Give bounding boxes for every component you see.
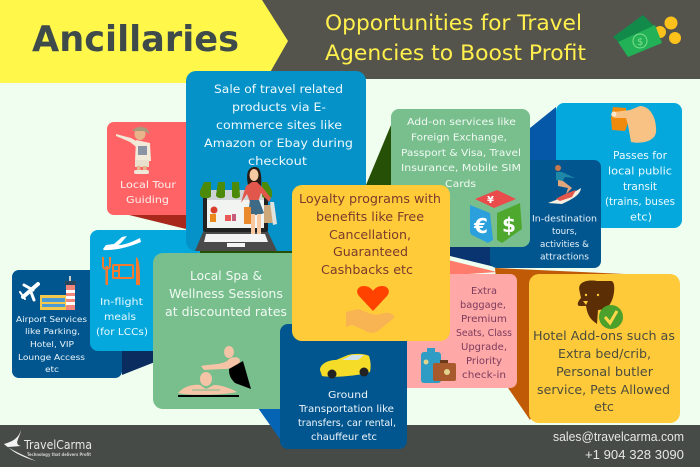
- text: spa: Wellness Sessions: [169, 286, 283, 301]
- icon: currency cube: [470, 190, 522, 243]
- text: extra baggage: check-in: [462, 370, 506, 381]
- text: e-commerce sale: Sale of travel related: [214, 82, 343, 96]
- header dark band: [250, 0, 700, 79]
- text: add-on services: Foreign Exchange,: [411, 132, 507, 144]
- text: in-destination tours: In-destination: [532, 214, 597, 224]
- subtitle: Agencies to Boost Profit: [325, 41, 586, 66]
- text: in-destination tours: attractions: [540, 252, 590, 262]
- panel: ground transportation: [280, 324, 407, 449]
- text: e-commerce sale: Amazon or Ebay during: [204, 136, 353, 150]
- text: ground transportation: Transportation like: [298, 404, 394, 415]
- text: local tour guiding: Guiding: [126, 195, 169, 206]
- text: spa: Local Spa &: [190, 268, 262, 283]
- text: extra baggage: Premium: [461, 314, 507, 325]
- icon: yellow car: [320, 354, 371, 378]
- text: hotel add-ons: Hotel Add-ons such as: [533, 329, 675, 343]
- text: loyalty programs: benefits like Free: [316, 210, 424, 224]
- text: add-on services: Cards: [445, 179, 476, 190]
- text: hotel add-ons: service, Pets Allowed: [537, 383, 670, 397]
- text: passes for transit: [605, 151, 675, 224]
- text: extra baggage: Upgrade,: [461, 342, 507, 353]
- logo: TravelCarma: TravelCarma: [23, 438, 92, 452]
- panel: airport services: [12, 270, 122, 378]
- text: extra baggage: Seats, Class: [456, 328, 512, 339]
- icon: money notes and coins: $: [637, 37, 643, 48]
- text: add-on services: Add-on services like: [407, 117, 516, 128]
- text: passes for transit: etc): [630, 212, 652, 224]
- text: hotel add-ons: etc: [594, 400, 614, 414]
- panel: local tour guiding: [107, 122, 197, 215]
- text: add-on services: Insurance, Mobile SIM: [401, 163, 521, 174]
- text: e-commerce sale: commerce sites like: [216, 118, 342, 132]
- text: in-flight meals: In-flight: [100, 297, 143, 308]
- text: loyalty programs: Cashbacks etc: [321, 263, 413, 277]
- panel: hotel add-ons: [529, 274, 680, 423]
- icon: heart over hand: [346, 286, 394, 333]
- text: airport services: Airport Services: [16, 314, 87, 324]
- text: hotel add-ons: Extra bed/crib,: [558, 347, 651, 361]
- icon: currency cube: $: [502, 213, 516, 237]
- text: loyalty programs: [299, 192, 441, 277]
- icon: online shop laptop with shopper: [195, 167, 277, 251]
- text: loyalty programs: Cancellation,: [329, 228, 411, 242]
- panel: add-on services: [391, 109, 530, 247]
- text: airport services: [16, 314, 87, 374]
- panel: in-flight meals: [90, 230, 200, 351]
- text: in-destination tours: tours,: [552, 227, 577, 237]
- text: in-flight meals: (for LCCs): [96, 327, 148, 338]
- text: passes for transit: Passes for: [613, 151, 668, 162]
- text: passes for transit: local public: [608, 166, 672, 178]
- text: local tour guiding: Local Tour: [120, 180, 177, 191]
- icon: massage: [178, 346, 251, 397]
- text: passes for transit: (trains, buses: [605, 197, 675, 208]
- text: ground transportation: transfers, car rental,: [298, 418, 396, 429]
- text: add-on services: [401, 117, 521, 190]
- text: ground transportation: chauffeur etc: [311, 432, 377, 443]
- text: e-commerce sale: checkout: [248, 154, 307, 168]
- header yellow arrow: [0, 0, 288, 83]
- footer contact: [553, 429, 684, 462]
- text: extra baggage: Priority: [466, 356, 503, 367]
- icon: plane, fork, tray and knife: [103, 236, 141, 285]
- icon: dog with check badge: [578, 280, 623, 329]
- text: e-commerce sale: products via E-: [232, 100, 326, 114]
- text: extra baggage: baggage,: [460, 300, 506, 311]
- panel: local spa and wellness: [153, 253, 303, 409]
- panel: loyalty programs: [292, 185, 450, 341]
- icon: currency cube: ¥: [487, 195, 494, 206]
- text: spa: [165, 268, 287, 319]
- footer contact: +1 904 328 3090: [585, 447, 684, 462]
- icon: hand holding ticket: [611, 106, 656, 143]
- panel: passes for public transit: [556, 103, 682, 228]
- panel: e-commerce sale: [186, 71, 366, 251]
- logo: TravelCarma: [4, 430, 92, 461]
- text: in-flight meals: meals: [104, 312, 136, 323]
- text: airport services: Lounge Access: [18, 352, 85, 362]
- text: airport services: like Parking,: [25, 326, 80, 336]
- icon: money notes and coins: [613, 15, 681, 57]
- footer contact: sales@travelcarma.com: [553, 429, 684, 444]
- text: loyalty programs: Guaranteed: [333, 245, 408, 259]
- text: in-flight meals: [96, 297, 148, 338]
- panel: extra baggage: [395, 274, 517, 388]
- text: extra baggage: [456, 286, 512, 381]
- text: airport services: etc: [45, 364, 59, 374]
- text: airport services: Hotel, VIP: [30, 339, 74, 349]
- text: loyalty programs: Loyalty programs with: [299, 192, 441, 206]
- icon: currency cube: €: [473, 214, 488, 238]
- text: in-destination tours: activities &: [540, 240, 589, 250]
- subtitle: [325, 11, 586, 66]
- text: hotel add-ons: Personal butler: [556, 365, 653, 379]
- text: spa: at discounted rates: [165, 304, 287, 319]
- text: local tour guiding: [120, 180, 177, 206]
- footer band: [0, 425, 700, 467]
- icon: surfer: [548, 165, 581, 204]
- panel: in-destination tours: [490, 160, 601, 268]
- icon: plane and control tower: [20, 276, 76, 310]
- text: ground transportation: Ground: [328, 390, 368, 401]
- text: ground transportation: [298, 390, 396, 443]
- subtitle: Opportunities for Travel: [325, 11, 582, 36]
- text: extra baggage: Extra: [471, 286, 497, 297]
- text: hotel add-ons: [533, 329, 675, 414]
- text: passes for transit: transit: [623, 182, 657, 193]
- icon: tour guide: [116, 127, 151, 174]
- title: Ancillaries: Ancillaries: [32, 19, 239, 60]
- fold shapes behind panels: [122, 107, 625, 442]
- text: add-on services: Passport & Visa, Travel: [401, 148, 521, 159]
- logo: TravelCarma: Technology that delivers Profit: [27, 452, 92, 458]
- text: e-commerce sale: [204, 82, 353, 168]
- icon: suitcases: [421, 348, 456, 383]
- text: in-destination tours: [532, 214, 597, 262]
